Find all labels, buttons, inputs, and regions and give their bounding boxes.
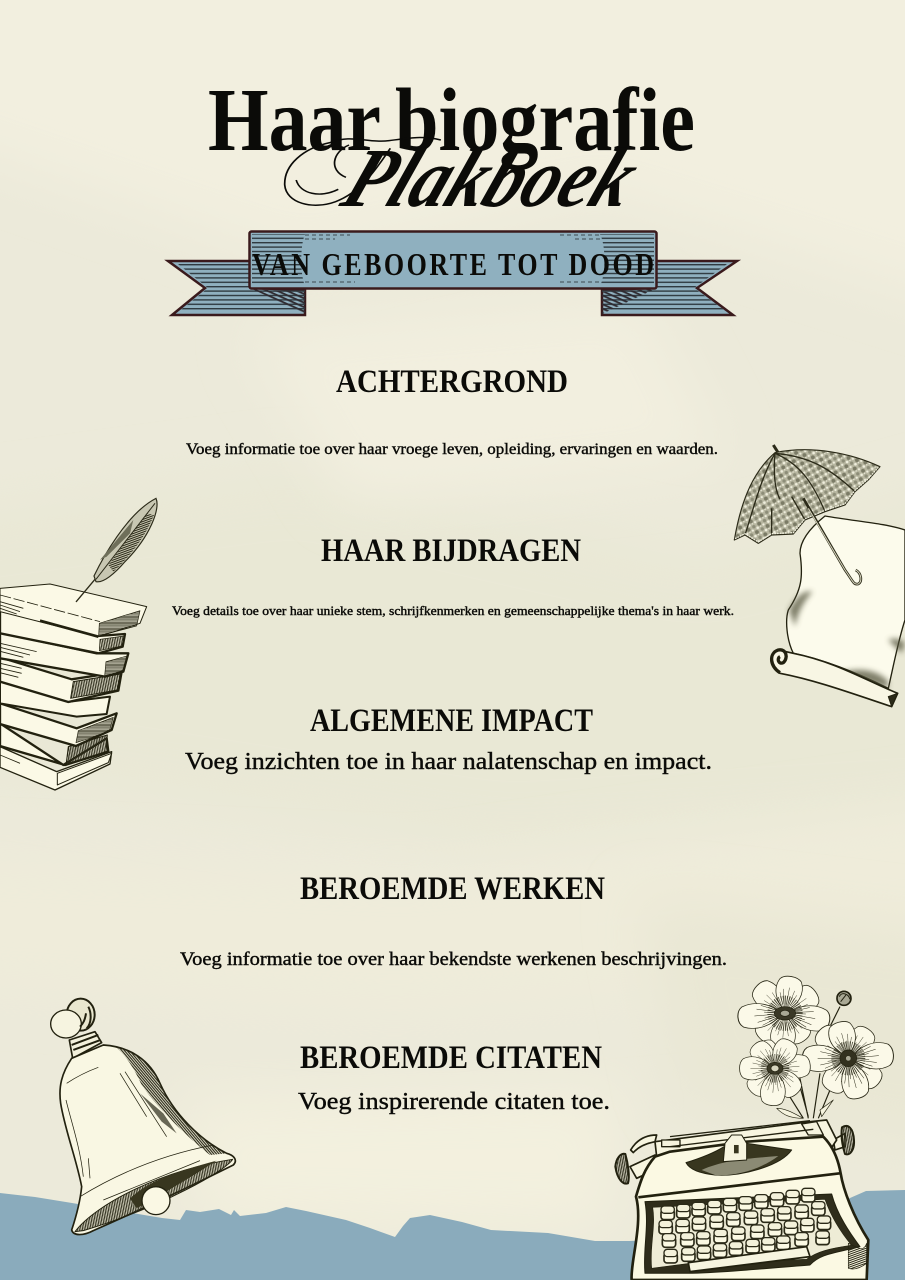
section: Achtergrond — [186, 364, 718, 458]
scroll — [771, 516, 905, 707]
body text: Voeg informatie toe over haar bekendste werkenen beschrijvingen. — [180, 949, 727, 970]
type basket — [686, 1135, 792, 1175]
heading: ACHTERGROND — [336, 364, 568, 400]
ribbon centre — [250, 232, 656, 288]
bell shading — [117, 1047, 227, 1155]
ribbon label: VAN GEBOORTE TOT DOOD — [252, 248, 654, 283]
typewriter keys — [659, 1188, 831, 1263]
torn blue strip at bottom — [0, 1190, 905, 1280]
section: Algemene impact — [185, 703, 712, 775]
heading: BEROEMDE CITATEN — [300, 1040, 602, 1076]
title line: Haar biografie: biografie — [395, 71, 695, 170]
title line: Haar biografie — [208, 71, 695, 170]
section: Beroemde werken — [180, 871, 727, 970]
book stack — [0, 584, 147, 790]
body text: Voeg inspirerende citaten toe. — [298, 1089, 610, 1115]
space bar — [688, 1247, 810, 1272]
flower bud — [837, 991, 851, 1005]
bell body — [60, 1045, 235, 1235]
keyboard panel — [638, 1173, 860, 1273]
ribbon banner — [168, 232, 737, 315]
body text: Voeg informatie toe over haar vroege leven, opleiding, ervaringen en waarden. — [186, 441, 718, 458]
clapper — [142, 1187, 170, 1215]
title script: Plakboek: Plakboek — [330, 131, 652, 224]
parasol — [734, 445, 880, 584]
body text: Voeg inzichten toe in haar nalatenschap en impact. — [185, 749, 712, 775]
flower left — [740, 1035, 811, 1107]
flower stems — [787, 1007, 840, 1118]
title line: Haar biografie: Haar — [208, 71, 381, 170]
icon: bell — [51, 999, 235, 1235]
icon: typewriter with flowers — [615, 974, 895, 1280]
typewriter body — [632, 1137, 868, 1280]
title — [208, 71, 695, 224]
heading: HAAR BIJDRAGEN — [321, 533, 581, 569]
heading: BEROEMDE WERKEN — [300, 871, 605, 907]
icon: stack of books with feather quill — [0, 498, 157, 790]
ribbon left tail — [168, 261, 305, 315]
section: Haar bijdragen — [172, 533, 734, 618]
icon: scroll with parasol — [734, 445, 905, 707]
heading: ALGEMENE IMPACT — [310, 703, 593, 739]
typewriter knobs and carriage — [615, 1120, 854, 1184]
flower top — [737, 974, 832, 1050]
ribbon right tail — [602, 261, 737, 315]
feather — [76, 498, 157, 602]
body text: Voeg details toe over haar unieke stem, schrijfkenmerken en gemeenschappelijke thema's in haar werk. — [172, 603, 734, 618]
bell mouth — [75, 1159, 233, 1232]
section: Beroemde citaten — [298, 1040, 610, 1115]
flower right — [802, 1019, 895, 1102]
bell top knob — [51, 999, 102, 1058]
